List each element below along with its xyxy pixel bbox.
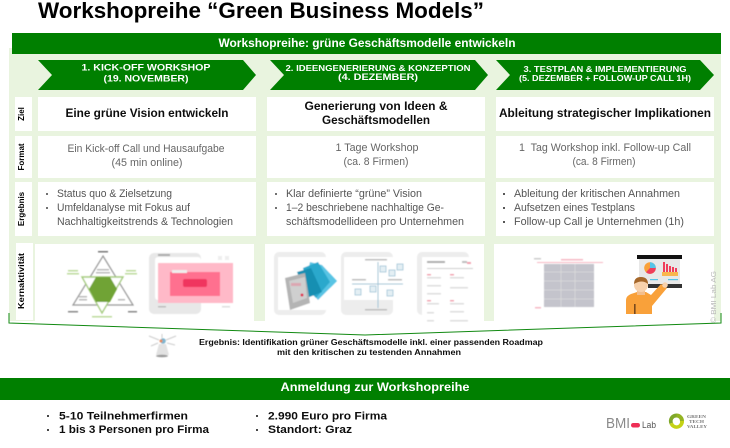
registration details right (256, 410, 388, 436)
icon: lightbulb figure (149, 334, 176, 357)
result card 1 (38, 182, 256, 236)
format card 2: (ca. 8 Firmen) (344, 156, 408, 168)
logo: Green Tech Valley (669, 413, 708, 429)
chevron: step 1 kick-off: (19. NOVEMBER) (104, 74, 188, 84)
icon: pink canvas (149, 253, 233, 314)
result card 1: Umfeldanalyse mit Fokus auf (57, 202, 191, 214)
format card 3: 1 Tag Workshop inkl. Follow-up Call (519, 142, 691, 154)
chevron: step 1 kick-off (38, 60, 256, 90)
row label: Ziel: Ziel (17, 107, 26, 121)
logo: Green Tech Valley: GREEN (687, 414, 707, 419)
logo: Green Tech Valley: TECH (689, 419, 705, 424)
goal card 2: Geschäftsmodellen (322, 115, 430, 127)
result card 2: 1–2 beschriebene nachhaltige Ge- (286, 202, 444, 214)
result card 1: Status quo & Zielsetzung (57, 188, 172, 200)
heading bar: workshop series: Workshopreihe: grüne Geschäftsmodelle entwickeln (218, 38, 516, 50)
icon: quadrant map (341, 252, 404, 315)
result card 3: Follow-up Call je Unternehmen (1h) (514, 216, 684, 228)
icon: presenter at chart board (626, 255, 682, 314)
copyright note: © BMI Lab AG (710, 271, 718, 323)
result statement: mit den kritischen zu testenden Annahmen (277, 348, 461, 357)
goal card 3 (496, 97, 714, 131)
format card 3 (496, 136, 714, 178)
row label: Ziel (15, 97, 32, 131)
heading bar: registration: Anmeldung zur Workshopreihe (280, 380, 470, 394)
activity card 2 (265, 244, 484, 330)
heading bar: registration (0, 378, 730, 400)
format card 1: (45 min online) (112, 157, 182, 169)
chevron: step 1 kick-off: 1. KICK-OFF WORKSHOP (82, 62, 211, 74)
registration details right: Standort: Graz (268, 424, 353, 436)
goal card 2: Generierung von Ideen & (304, 101, 448, 113)
row label: Format: Format (17, 143, 26, 171)
goal card 1: Eine grüne Vision entwickeln (66, 108, 228, 120)
registration details left: 5-10 Teilnehmerfirmen (59, 410, 188, 422)
result card 3 (496, 182, 714, 236)
result statement: Ergebnis: Identifikation grüner Geschäftsmodelle inkl. einer passenden Roadmap (199, 338, 543, 347)
goal card 2 (267, 97, 485, 131)
row label: Ergebnis: Ergebnis (17, 191, 26, 226)
goal card 3: Ableitung strategischer Implikationen (499, 108, 711, 120)
row label: Format (15, 136, 32, 178)
chevron: step 3 testplan: (5. DEZEMBER + FOLLOW-UP CALL 1H) (519, 74, 691, 83)
row label: Kernaktivität: Kernaktivität (17, 253, 26, 309)
format card 2 (267, 136, 485, 178)
registration details right: 2.990 Euro pro Firma (268, 410, 388, 422)
chevron: step 3 testplan (496, 60, 714, 90)
logo: Green Tech Valley: VALLEY (687, 424, 708, 429)
format card 3: (ca. 8 Firmen) (572, 156, 636, 168)
icon: idea sheet (417, 252, 482, 330)
goal card 1 (38, 97, 256, 131)
format card 1: Ein Kick-off Call und Hausaufgabe (68, 143, 224, 155)
icon: test plan grid (534, 258, 603, 308)
chevron: step 2 ideation (270, 60, 488, 90)
result card 3: Aufsetzen eines Testplans (514, 202, 635, 214)
activity card 1 (35, 244, 254, 330)
format card 2: 1 Tage Workshop (336, 142, 418, 154)
row label: Kernaktivität (16, 243, 33, 320)
funnel bottom edge (0, 313, 730, 345)
logo: BMI Lab: BMI (606, 415, 630, 432)
chevron: step 2 ideation: (4. DEZEMBER) (338, 72, 418, 83)
format card 1 (38, 136, 256, 178)
activity card 3 (494, 244, 714, 330)
chevron: step 2 ideation: 2. IDEENGENERIERUNG & KONZEPTION (286, 63, 470, 73)
result card 2: Klar definierte “grüne” Vision (286, 188, 422, 200)
result card 2 (267, 182, 485, 236)
logo: BMI Lab: Lab (642, 420, 656, 430)
result card 3: Ableitung der kritischen Annahmen (514, 188, 680, 200)
icon: triangle strategy diagram (67, 251, 137, 318)
result card 2: schäftsmodellideen pro Unternehmen (286, 216, 464, 228)
icon: blue card deck (274, 252, 337, 315)
registration details left (47, 410, 210, 436)
registration details left: 1 bis 3 Personen pro Firma (59, 424, 210, 436)
heading bar: workshop series (12, 33, 721, 54)
result card 1: Nachhaltigkeitstrends & Technologien (57, 216, 233, 228)
panel: workshop programme background (9, 48, 721, 321)
result statement (199, 338, 543, 357)
logo: BMI Lab (606, 415, 656, 432)
row label: Ergebnis (15, 182, 32, 236)
chevron: step 3 testplan: 3. TESTPLAN & IMPLEMENTIERUNG (524, 65, 686, 74)
